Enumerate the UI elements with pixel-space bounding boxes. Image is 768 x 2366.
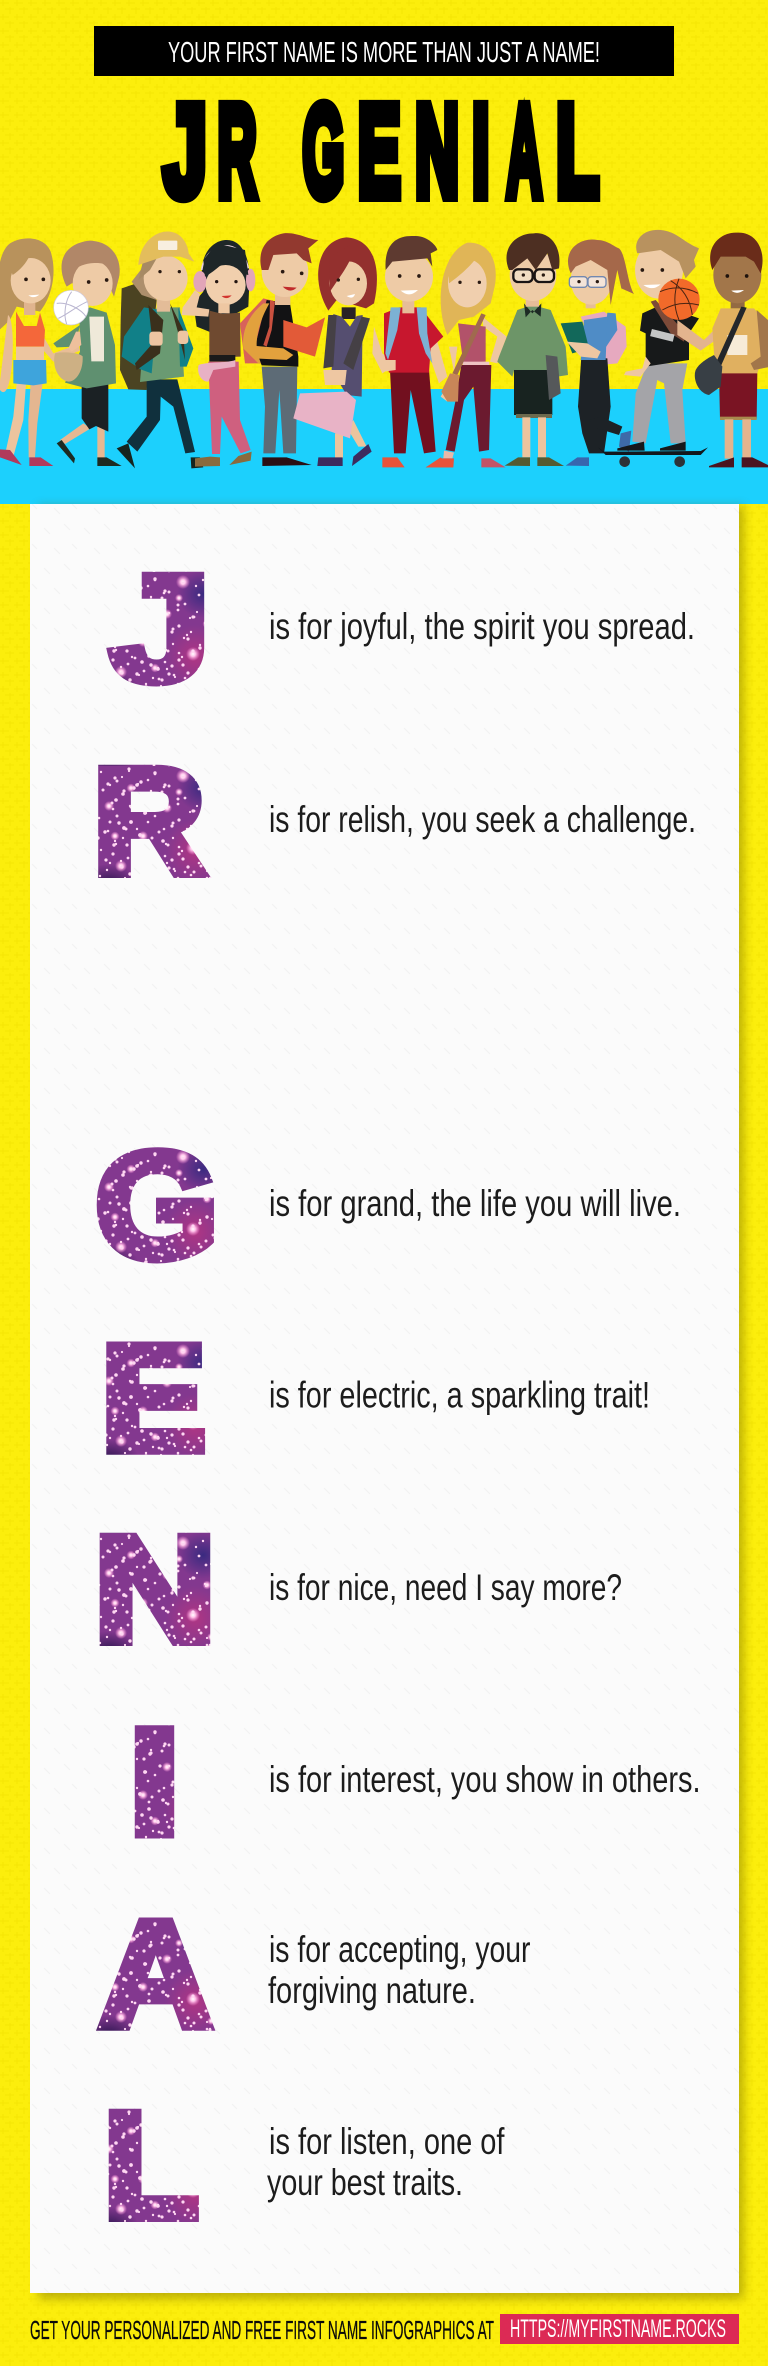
sentence E: is for electric, a sparkling trait!	[269, 1374, 650, 1416]
row A	[100, 1890, 530, 2058]
sentence N: is for nice, need I say more?	[269, 1567, 622, 1608]
person 2: girl with volleyball	[53, 241, 122, 466]
letter R: R	[93, 737, 205, 905]
sentence L line 1: is for listen, one of	[269, 2121, 505, 2162]
person 11: boy on skateboard with basketball	[598, 230, 721, 467]
illustration: group of people, left half	[0, 232, 377, 468]
title: J	[164, 80, 207, 224]
row I	[128, 1698, 700, 1866]
letter G: G	[96, 1121, 219, 1289]
row R	[93, 737, 696, 905]
tagline banner	[94, 26, 674, 76]
white content card	[30, 504, 739, 2293]
title: E	[358, 80, 401, 224]
illustration: group of people, right half	[372, 230, 768, 467]
person 1: girl in orange top	[0, 238, 80, 466]
person 9: boy with glasses in green sweater	[497, 233, 568, 466]
person 6: girl with red hair and pink bag	[293, 237, 377, 466]
person 5: boy with book	[240, 233, 325, 466]
person 8: blonde girl with shoulder bag	[426, 243, 507, 467]
letter L: L	[104, 2081, 198, 2249]
title: I	[472, 80, 489, 224]
letter J: J	[110, 544, 210, 712]
sentence A line 1: is for accepting, your	[269, 1929, 530, 1970]
sentence L line 2: your best traits.	[267, 2162, 463, 2203]
row G	[96, 1121, 681, 1289]
person 3: boy with cap and backpack	[117, 232, 203, 468]
person 12: boy with curly hair and yellow tank	[695, 233, 768, 467]
row E	[101, 1314, 650, 1482]
title: L	[556, 80, 599, 224]
letter E: E	[101, 1314, 206, 1482]
blue floor band	[0, 389, 768, 504]
row J	[110, 544, 695, 712]
person 4: girl with pink headphones	[182, 240, 255, 467]
letter I: I	[128, 1698, 180, 1866]
title: N	[415, 80, 459, 224]
title: G	[303, 80, 344, 224]
letter N: N	[94, 1505, 216, 1673]
row N	[94, 1505, 622, 1673]
person 7: boy in red shirt	[372, 236, 453, 467]
card shadow	[38, 506, 744, 2299]
person 10: girl with ponytail and tablet	[561, 239, 634, 466]
row L	[104, 2081, 505, 2249]
title: R	[218, 80, 257, 224]
sentence A line 2: forgiving nature.	[268, 1970, 476, 2011]
title: A	[506, 80, 542, 224]
letter A: A	[100, 1890, 212, 2058]
